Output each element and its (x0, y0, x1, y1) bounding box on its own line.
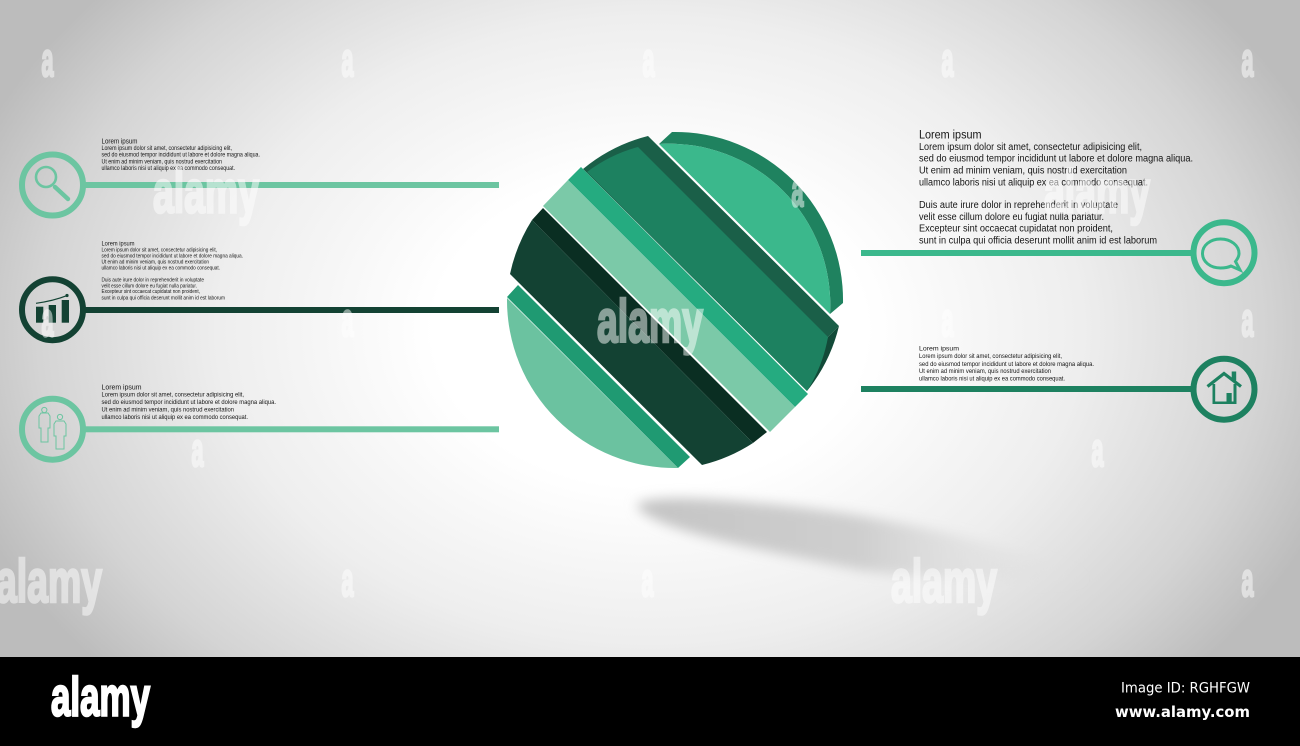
text block: Lorem ipsum (102, 384, 142, 391)
watermarks: a (942, 293, 954, 346)
watermarks: a (192, 423, 204, 476)
text block: Lorem ipsum dolor sit amet, consectetur adipisicing elit, (919, 142, 1142, 153)
icon ring (22, 399, 83, 460)
icon: bar chart (36, 294, 69, 323)
text block: sed do eiusmod tempor incididunt ut labore et dolore magna aliqua. (102, 152, 260, 158)
text block (102, 384, 276, 421)
text block: Excepteur sint occaecat cupidatat non proident, (919, 224, 1113, 234)
text: a (1242, 33, 1254, 86)
icon: house (1208, 372, 1241, 404)
text block: ullamco laboris nisi ut aliquip ex ea commodo consequat. (919, 178, 1148, 188)
text block: Ut enim ad minim veniam, quis nostrud exercitation (102, 406, 234, 414)
watermarks: a (342, 293, 354, 346)
text block: Duis aute irure dolor in reprehenderit in voluptate (102, 278, 204, 284)
sliced sphere (507, 132, 843, 468)
icon: people (39, 407, 66, 449)
callout: bottom left people (22, 384, 499, 460)
slice 1: top right segment (659, 132, 843, 314)
text block: Ut enim ad minim veniam, quis nostrud exercitation (919, 166, 1127, 176)
text block: velit esse cillum dolore eu fugiat nulla pariatur. (919, 212, 1104, 223)
text block: Lorem ipsum (919, 346, 959, 352)
watermarks: alamy (597, 288, 703, 355)
text block: Lorem ipsum (919, 130, 982, 142)
text block: Lorem ipsum dolor sit amet, consectetur adipisicing elit, (102, 248, 217, 254)
watermarks: a (342, 553, 354, 606)
connector line (85, 307, 499, 313)
text block: Lorem ipsum (102, 138, 138, 146)
callout: top left magnifier (22, 138, 499, 216)
text block: sunt in culpa qui officia deserunt mollit anim id est laborum (919, 235, 1157, 246)
watermarks: a (642, 33, 655, 86)
text block: ullamco laboris nisi ut aliquip ex ea commodo consequat. (102, 266, 220, 272)
icon ring (22, 154, 83, 216)
watermarks: a (642, 553, 654, 606)
text: a (1242, 553, 1254, 606)
text block: sunt in culpa qui officia deserunt mollit anim id est laborum (102, 295, 225, 301)
watermarks: alamy (0, 548, 102, 615)
text block (102, 241, 243, 301)
callout: middle left chart (22, 241, 499, 340)
callout: bottom right house (861, 346, 1254, 420)
text block: sed do eiusmod tempor incididunt ut labore et dolore magna aliqua. (919, 361, 1094, 368)
text block: sed do eiusmod tempor incididunt ut labore et dolore magna aliqua. (102, 254, 243, 260)
text block: Duis aute irure dolor in reprehenderit in voluptate (919, 200, 1118, 211)
text block: ullamco laboris nisi ut aliquip ex ea commodo consequat. (102, 166, 235, 172)
sphere shadow (636, 498, 1090, 581)
icon: speech bubble (1202, 239, 1240, 270)
watermarks (0, 33, 1254, 615)
connector line (861, 250, 1192, 256)
text block: sed do eiusmod tempor incididunt ut labore et dolore magna aliqua. (919, 154, 1193, 164)
watermarks: alamy (153, 158, 259, 226)
watermarks: a (42, 33, 54, 86)
text block (919, 130, 1193, 246)
watermarks: a (942, 33, 954, 86)
text block (102, 138, 260, 172)
website: www.alamy.com (1115, 703, 1250, 721)
slice 2: medium green band (583, 136, 839, 391)
text block: Ut enim ad minim veniam, quis nostrud exercitation (102, 159, 222, 165)
icon ring (1194, 222, 1254, 283)
slice 3: light green band (543, 167, 808, 432)
watermarks: a (42, 293, 54, 346)
text block: Lorem ipsum dolor sit amet, consectetur adipisicing elit, (102, 392, 244, 398)
footer logo: alamy (51, 666, 150, 728)
connector line (85, 426, 499, 432)
text block: Ut enim ad minim veniam, quis nostrud exercitation (102, 260, 209, 266)
text block: velit esse cillum dolore eu fugiat nulla pariatur. (102, 283, 197, 289)
text: a (1242, 293, 1254, 346)
image id: Image ID: RGHFGW (1121, 680, 1250, 696)
watermarks: a (342, 33, 354, 86)
text block: sed do eiusmod tempor incididunt ut labore et dolore magna aliqua. (102, 399, 276, 406)
text block: Lorem ipsum (102, 241, 134, 247)
text block: Lorem ipsum dolor sit amet, consectetur adipisicing elit, (919, 353, 1062, 360)
connector line (861, 386, 1192, 392)
text block: Ut enim ad minim veniam, quis nostrud exercitation (919, 368, 1052, 375)
connector line (85, 182, 499, 188)
footer bar (0, 657, 1300, 746)
slice 4: dark green band (510, 208, 767, 465)
slice 5: lower left segment (507, 285, 690, 468)
icon: magnifier (36, 167, 68, 199)
text block: ullamco laboris nisi ut aliquip ex ea commodo consequat. (102, 414, 248, 421)
icon ring (22, 279, 83, 340)
watermarks: alamy (1044, 158, 1150, 226)
text block: Lorem ipsum dolor sit amet, consectetur adipisicing elit, (102, 146, 232, 152)
icon ring (1194, 359, 1254, 420)
callout: top right speech bubble (861, 130, 1254, 283)
watermarks: a (1092, 423, 1104, 476)
watermarks: a (792, 163, 804, 216)
text block: Excepteur sint occaecat cupidatat non proident, (102, 289, 200, 295)
watermarks: alamy (891, 548, 997, 615)
text block (919, 346, 1094, 382)
text block: ullamco laboris nisi ut aliquip ex ea commodo consequat. (919, 376, 1065, 382)
